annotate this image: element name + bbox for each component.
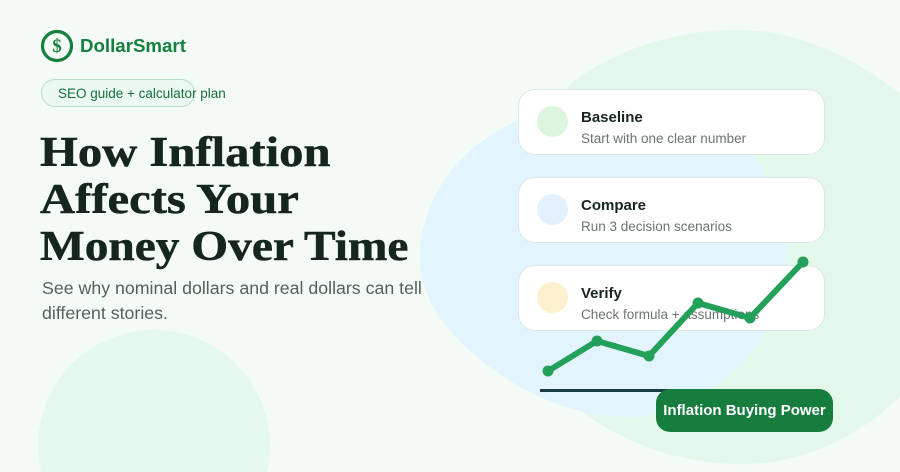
- icon: blue dot: [537, 194, 568, 225]
- subtitle: See why nominal dollars and real dollars can tell: [42, 278, 422, 298]
- subtitle: different stories.: [42, 303, 168, 323]
- badge: [656, 389, 833, 432]
- card text: Run 3 decision scenarios: [581, 219, 732, 234]
- panel: verify card: [518, 265, 825, 331]
- panel: baseline card: [518, 89, 825, 155]
- pill tag: [41, 79, 226, 107]
- icon: green dot: [537, 106, 568, 137]
- card heading: Compare: [581, 197, 646, 214]
- card heading: Verify: [581, 285, 622, 302]
- trend line: [542, 256, 808, 376]
- badge: Inflation Buying Power: [663, 402, 826, 419]
- icon: dollar coin: [40, 30, 74, 62]
- subtitle: [42, 278, 422, 323]
- logo: [40, 30, 186, 62]
- icon: dollar coin: $: [52, 36, 62, 57]
- card heading: Baseline: [581, 109, 643, 126]
- title: How Inflation: [40, 130, 331, 176]
- title: Money Over Time: [40, 224, 408, 270]
- icon: amber dot: [537, 282, 568, 313]
- title: [40, 130, 408, 270]
- brand name: DollarSmart: [80, 35, 186, 56]
- line chart: [540, 256, 808, 392]
- panel: compare card: [518, 177, 825, 243]
- chart baseline: [540, 389, 815, 392]
- card text: Start with one clear number: [581, 131, 746, 146]
- card text: Check formula + assumptions: [581, 307, 759, 322]
- title: Affects Your: [40, 177, 299, 223]
- pill tag: SEO guide + calculator plan: [58, 86, 226, 101]
